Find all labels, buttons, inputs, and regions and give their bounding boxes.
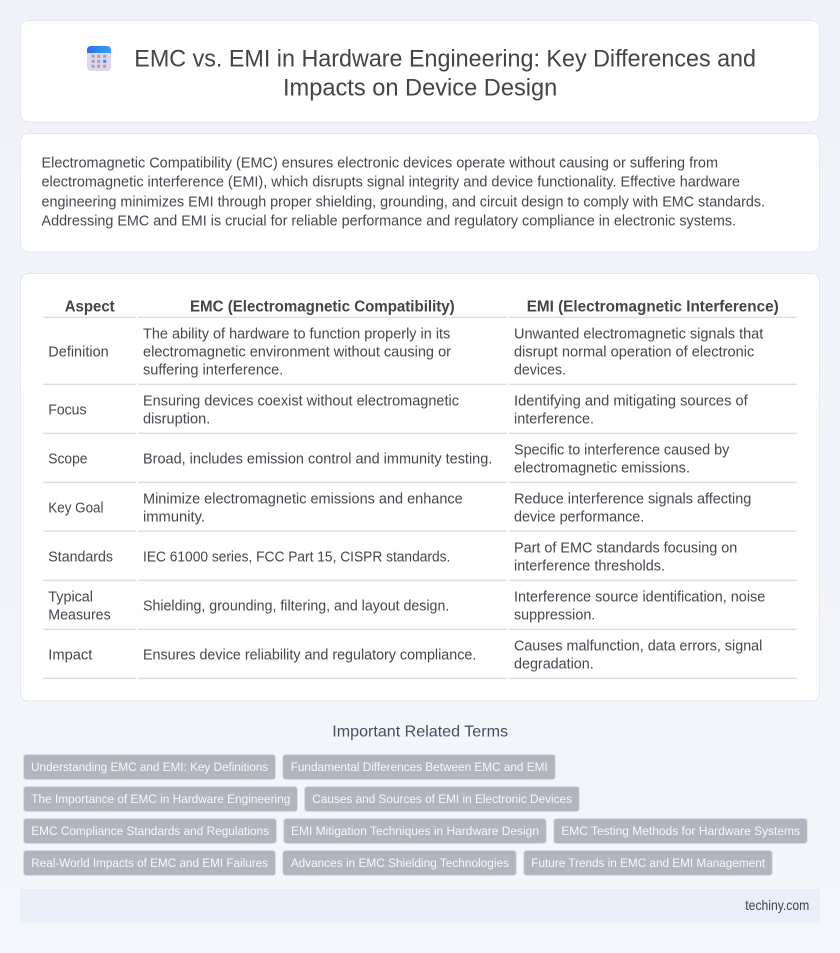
panel: introduction text: electromagnetic interference (EMI), which disrupts signal integrity and device functionality. Effective hardware [42, 175, 740, 191]
table header row [43, 298, 797, 318]
panel: introduction text: Electromagnetic Compatibility (EMC) ensures electronic devices operate without causing or suffering from [42, 155, 718, 171]
row: Standards [43, 541, 797, 581]
row: Focus: interference. [514, 411, 594, 427]
tag: Fundamental Differences Between EMC and EMI [291, 760, 548, 774]
footer bar [20, 889, 820, 923]
row: Typical Measures: Shielding, grounding, filtering, and layout design. [143, 599, 449, 615]
row: Focus: Ensuring devices coexist without electromagnetic [143, 393, 459, 409]
panel: introduction text [20, 134, 820, 252]
tag: Understanding EMC and EMI: Key Definitions [31, 760, 268, 774]
row: Scope: Broad, includes emission control and immunity testing. [143, 452, 492, 468]
row: Focus: disruption. [143, 411, 210, 427]
panel: comparison table [20, 274, 820, 701]
row: Standards: Part of EMC standards focusing on [514, 541, 737, 557]
tag: Causes and Sources of EMI in Electronic Devices [312, 792, 572, 806]
tag [554, 818, 807, 844]
row: Key Goal [43, 491, 797, 532]
row: Definition: Definition [48, 345, 109, 361]
tag [24, 786, 298, 812]
row: Standards: interference thresholds. [514, 559, 665, 575]
row: Key Goal: Minimize electromagnetic emissions and enhance [143, 491, 463, 507]
tag [304, 786, 579, 812]
row: Scope: electromagnetic emissions. [514, 461, 690, 477]
table header row: EMC (Electromagnetic Compatibility) [190, 298, 455, 315]
footer bar: techiny.com [745, 897, 809, 913]
row: Typical Measures: Measures [48, 608, 111, 624]
row: Scope: Scope [48, 452, 88, 468]
panel: introduction text: engineering minimizes EMI through proper shielding, grounding, and circuit design to comply with EMC standards. [42, 194, 765, 210]
row: Focus: Identifying and mitigating sources of [514, 393, 749, 409]
tag [283, 850, 516, 876]
row: Impact: Causes malfunction, data errors, signal [514, 639, 762, 655]
row: Definition: suffering interference. [143, 363, 283, 379]
row: Impact: Impact [48, 648, 92, 664]
tag [24, 818, 276, 844]
row: Key Goal: immunity. [143, 509, 205, 525]
tag: Advances in EMC Shielding Technologies [291, 856, 509, 870]
title: EMC vs. EMI in Hardware Engineering: Key Differences and [134, 46, 756, 73]
row: Key Goal: device performance. [514, 509, 644, 525]
row: Definition: electromagnetic environment without causing or [143, 345, 451, 361]
row: Impact [43, 639, 797, 679]
row: Standards: IEC 61000 series, FCC Part 15, CISPR standards. [143, 550, 450, 566]
row: Typical Measures: suppression. [514, 608, 595, 624]
tag: EMC Testing Methods for Hardware Systems [561, 824, 800, 838]
table header row: EMI (Electromagnetic Interference) [527, 298, 779, 315]
table header row: Aspect [65, 298, 115, 315]
related term tags [24, 754, 807, 876]
row: Typical Measures: Interference source identification, noise [514, 590, 765, 606]
row: Definition: disrupt normal operation of electronic [514, 345, 754, 361]
icon: calendar [87, 46, 111, 71]
tag [283, 754, 555, 780]
title: Impacts on Device Design [283, 74, 557, 101]
tag: EMC Compliance Standards and Regulations [31, 824, 269, 838]
tag: The Importance of EMC in Hardware Engineering [31, 792, 290, 806]
row: Focus: Focus [48, 402, 86, 418]
row: Impact: degradation. [514, 657, 594, 673]
row: Definition: The ability of hardware to function properly in its [143, 327, 450, 343]
row: Standards: Standards [48, 550, 113, 566]
tag [284, 818, 546, 844]
row: Definition: Unwanted electromagnetic signals that [514, 327, 763, 343]
heading: important related terms: Important Related Terms [332, 724, 508, 741]
row: Key Goal: Key Goal [48, 501, 104, 517]
panel: introduction text: Addressing EMC and EMI is crucial for reliable performance and regulatory compliance in electronic systems. [42, 213, 736, 229]
tag [24, 850, 276, 876]
row: Scope: Specific to interference caused by [514, 443, 730, 459]
row: Typical Measures [43, 590, 797, 630]
row: Focus [43, 393, 797, 434]
row: Definition [43, 327, 797, 385]
tag: Future Trends in EMC and EMI Management [531, 856, 766, 870]
tag [524, 850, 772, 876]
row: Definition: devices. [514, 363, 566, 379]
title [134, 46, 756, 101]
tag: Real-World Impacts of EMC and EMI Failures [31, 856, 268, 870]
tag: EMI Mitigation Techniques in Hardware Design [291, 824, 539, 838]
tag [24, 754, 276, 780]
row: Impact: Ensures device reliability and regulatory compliance. [143, 648, 476, 664]
panel: title header [20, 20, 820, 122]
row: Typical Measures: Typical [48, 590, 93, 606]
row: Key Goal: Reduce interference signals affecting [514, 491, 751, 507]
row: Scope [43, 443, 797, 483]
